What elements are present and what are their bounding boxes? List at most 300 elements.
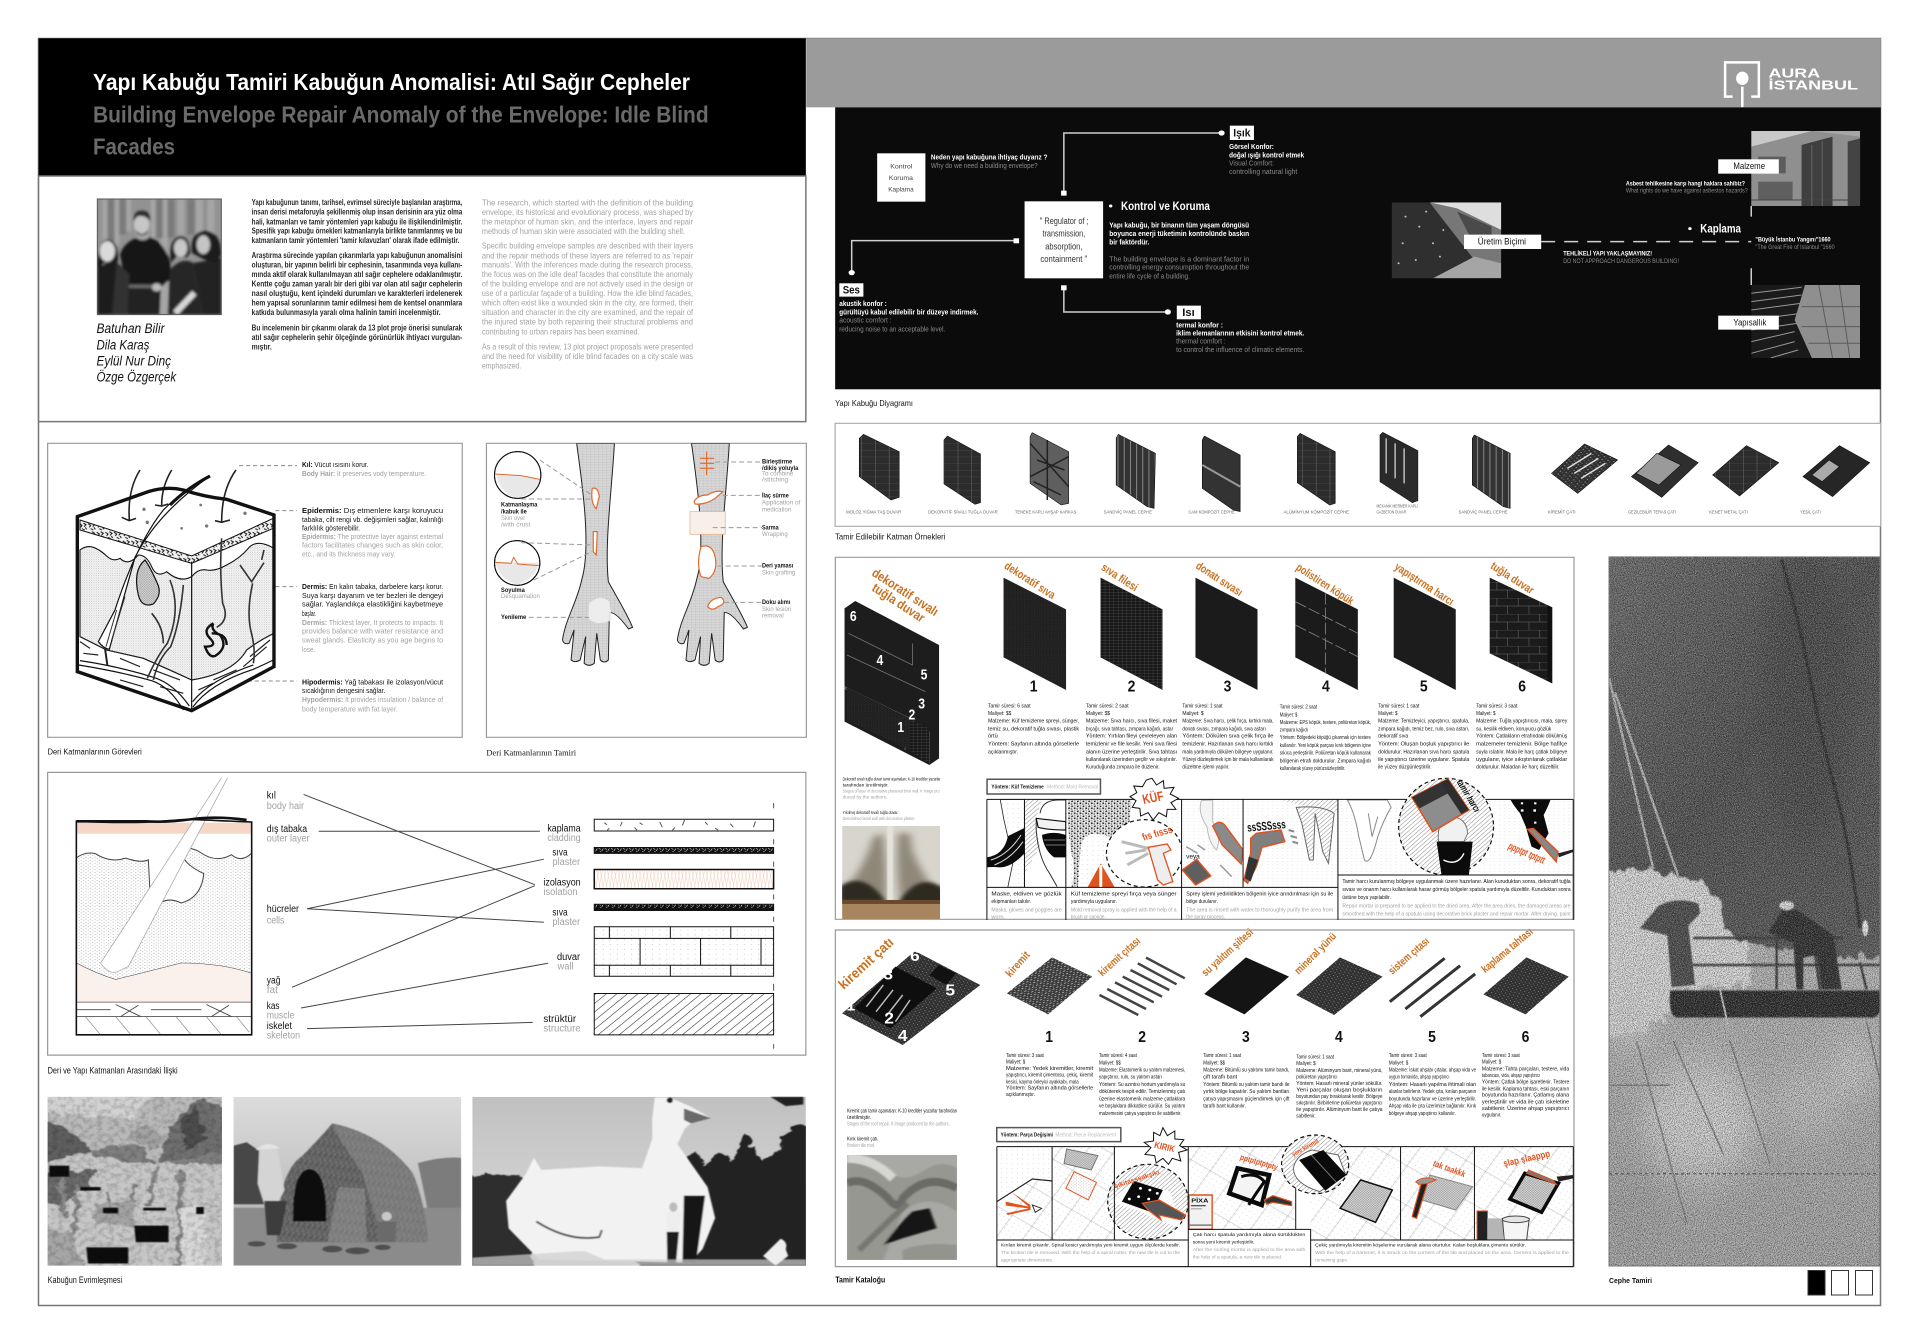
scene: tiles marked <box>1052 1147 1114 1240</box>
layer 5 system battens <box>1390 958 1475 1046</box>
building layer labels <box>543 823 581 1034</box>
building layer labels: sıva <box>552 907 568 918</box>
roof layer descriptions: Tamir süresi: 1 saat <box>1203 1053 1241 1059</box>
wall layer axonometric: 4 <box>877 651 884 668</box>
roof layer descriptions: Tamir süresi: 3 saat <box>1389 1053 1427 1059</box>
stage notes <box>843 777 941 822</box>
photo: material <box>1751 131 1860 206</box>
layer 1 tile <box>1007 957 1092 1046</box>
layer descriptions: Malzeme: Tuğla yapıştırıcısı, mala, sprey <box>1476 719 1568 724</box>
roof layer descriptions: uygun tornavida, ahşap yapıştırıcı <box>1389 1075 1450 1080</box>
caption: skin functions: Deri Katmanlarının Görevleri <box>48 748 142 757</box>
skin function notes: başlar. <box>302 610 316 618</box>
roof layer axonometric: 6 <box>910 947 920 965</box>
english body text: which often exist like a wounded skin in the city, are formed, their <box>481 299 693 308</box>
panel: tiled roof repair <box>835 930 1574 1285</box>
method tag: mould cleaning: Yöntem: Küf Temizleme <box>991 785 1044 790</box>
label: sound: Ses <box>843 284 860 296</box>
roof layer descriptions: Tamir süresi: 1 saat <box>1296 1054 1334 1060</box>
layer 2 mesh <box>1100 578 1163 695</box>
turkish body text: Araştırma sürecinde yapılan çıkarımlarla yapı kabuğunun anomalisini <box>252 252 462 260</box>
layer 3 reinforcement plaster: 3 <box>1224 678 1231 695</box>
leader lines <box>199 466 297 681</box>
layer 4 polystyrene foam <box>1295 578 1358 695</box>
label: material <box>1718 159 1779 174</box>
team photo <box>97 199 221 315</box>
panel: introduction <box>39 176 806 422</box>
question <box>931 154 1047 170</box>
skin function notes: Hypodermis: It provides insulation / balance of <box>302 696 443 704</box>
panel: gray header band with logo <box>806 38 1881 107</box>
new tile detail circle <box>1282 1135 1349 1194</box>
roof layer descriptions: Maliyet: $ <box>1006 1060 1026 1065</box>
label: heat: termal konfor : <box>1176 322 1223 329</box>
roof layer descriptions: Tamir süresi: 3 saat <box>1482 1053 1520 1059</box>
layer 6 brick wall: 6 <box>1518 678 1526 695</box>
skin section illustration <box>76 778 252 1035</box>
roof stage notes: üretilmiştir. <box>847 1115 871 1121</box>
layer descriptions: Maliyet: $ <box>1280 712 1297 718</box>
connection lines <box>292 794 548 1029</box>
repair labels right: To combine <box>762 469 793 477</box>
layer titles: plastered wall: sıva filesi <box>1099 562 1140 594</box>
turkish body text: insan derisi metaforuyla şekillenmiş olup insan derisinin ara yüz olma <box>252 208 462 217</box>
roof layer descriptions: boyutunda hazırlanır. Çatlamış alana <box>1482 1093 1569 1098</box>
layer 6 cladding board <box>1483 957 1569 1046</box>
layer titles: tiled roof: mineral yünü <box>1292 930 1339 977</box>
scene: hammering <box>1401 1147 1474 1240</box>
sample labels: SANDVİÇ PANEL CEPHE <box>1459 509 1507 515</box>
english body text: Specific building envelope samples are described with their layers <box>482 242 693 251</box>
comic captions: tile replacement: Çatı harcı spatula yardımıyla alana sürüldükten <box>1193 1232 1306 1237</box>
method tag: mould cleaning: Method: Mold Removal <box>1047 785 1098 790</box>
author names: Özge Özgerçek <box>97 369 177 385</box>
skin function notes: body temperature with fat layer. <box>302 705 398 714</box>
skin function notes: Dermis: En kalın tabaka, darbelere karşı korur. <box>302 583 443 591</box>
roof layer descriptions: Maliyet: $ <box>1296 1061 1316 1067</box>
turkish body text: Yapı kabuğunun tanımı, tarihsel, evrimsel süreciyle başlanılan araştırma, <box>252 199 462 207</box>
building layer labels: wall <box>557 961 574 972</box>
label: sound <box>839 283 978 333</box>
comic captions: tile replacement: appropriate dimensions. <box>1001 1258 1053 1263</box>
label: structural: Yapısallık <box>1733 318 1767 328</box>
layer descriptions: kullanılarak üzerinden geçilir ve sıkıştırılır. <box>1086 757 1177 763</box>
skin layer labels: hücreler <box>267 903 299 914</box>
skin function notes: sağlar. Yaşlandıkça elastikliğini kaybetmeye <box>302 600 444 609</box>
skin function notes: sıcaklığının dengesini sağlar. <box>302 687 385 695</box>
roof layer axonometric: 4 <box>898 1027 908 1045</box>
photo: mouldy wall <box>837 826 946 919</box>
label: light: Visual Comfort: <box>1229 160 1274 168</box>
label: structural <box>1718 316 1779 330</box>
layer descriptions: kullanılır. Yeni köpük parçası kırık bölgenin içine <box>1280 743 1371 749</box>
comic captions: mould cleaning: ekipmanları takılır. <box>991 899 1031 905</box>
turkish body text: katkıda bulunmasıyla yaralı olma halinin tamiri incelenmiştir. <box>252 309 441 317</box>
comic captions: mould cleaning: smoothed with the help of a spatula using decorative brick plaster and repair mortar. After drying, paint <box>1342 911 1571 917</box>
sample labels: GAZBETON DUVAR <box>1377 509 1406 515</box>
caption: relation: Deri ve Yapı Katmanları Arasındaki İlişki <box>48 1066 178 1076</box>
roof stage notes: Stages of the roof repair. K Image produced by the authors. <box>847 1121 950 1127</box>
scene: mould spray <box>1066 799 1182 887</box>
arms illustration <box>563 443 747 665</box>
roof layer axonometric: 5 <box>945 982 955 999</box>
roof layer descriptions: çatıya yapışmasını güçlendirmek için çift <box>1203 1096 1290 1102</box>
skin layer labels: body hair <box>267 800 304 811</box>
title english: Building Envelope Repair Anomaly of the Envelope: Idle Blind <box>93 103 709 128</box>
layer descriptions: donatı sıvası, zımpara kağıdı, sıva astarı <box>1182 726 1266 732</box>
skin function notes: Kıl: Vücut ısısını korur. <box>302 461 369 469</box>
comic captions: mould cleaning: The area is rinsed with water to thoroughly purify the area from <box>1186 907 1333 913</box>
scene: cement applied <box>1474 1147 1573 1240</box>
panel: skin layer repair <box>486 443 806 758</box>
cutter sound: şıkıtaşşşakşıkı <box>1113 1169 1161 1190</box>
layer descriptions: Maliyet: $ <box>1476 711 1496 717</box>
roof layer axonometric: 2 <box>884 1010 894 1028</box>
layer descriptions: su, kesilik eldiven, koruyucu gözlük <box>1476 726 1552 732</box>
photo: broken tile <box>847 1155 957 1260</box>
skin function notes: etc., and its thickness may vary. <box>302 550 395 559</box>
building layer labels: sıva <box>552 847 568 858</box>
starburst: mould <box>1130 778 1179 820</box>
wall layer axonometric <box>845 601 939 765</box>
layer 6 cladding board: 6 <box>1522 1029 1529 1046</box>
english body text: situation and character in the city are examined, and the repair of <box>482 309 693 317</box>
repair labels right <box>762 457 801 619</box>
title turkish: Yapı Kabuğu Tamiri Kabuğun Anomalisi: Atıl Sağır Cepheler <box>93 70 690 95</box>
new tile detail circle: yeni kiremit <box>1291 1138 1321 1158</box>
title english: Facades <box>93 135 175 160</box>
english body text: of the building envelope and are not actively used in the design or <box>482 280 693 289</box>
roof layer descriptions: Maliyet: $ <box>1389 1060 1408 1066</box>
layer descriptions: temizlenir. Hazırlanan sıva harcı kırtıklı <box>1182 742 1274 747</box>
cement sound: şlap şlaappp <box>1502 1149 1551 1169</box>
box: regulator: transmission, <box>1042 229 1085 239</box>
layer titles: plastered wall: yapıştırma harcı <box>1392 561 1456 608</box>
roof layer descriptions: uygulanır. <box>1482 1112 1501 1118</box>
roof layer descriptions: Tamir süresi: 3 saat <box>1006 1053 1044 1059</box>
comic captions: mould cleaning: Küf temizleme spreyi fırça veya sünger <box>1071 891 1177 897</box>
roof layer descriptions: Malzeme: Bitümlü su yalıtımı tamir bandı, <box>1203 1068 1290 1073</box>
stage notes: tarafından üretilmiştir. <box>843 783 889 788</box>
roof layer descriptions: Ahşap vida ile çıta üzerimize bağlanılır. Kırık <box>1389 1104 1477 1109</box>
panel: building envelope diagram: Neden yapı kabuğuna ihtiyaç duyarız ? <box>931 154 1047 161</box>
english body text: and the need for visibility of idle blind facades on a city scale was <box>482 353 693 361</box>
layer descriptions: Malzeme: Sıva harcı, sıva filesi, maket <box>1086 719 1177 724</box>
layer titles: tiled roof: kiremit çıtası <box>1096 935 1143 979</box>
repair labels right: Birleştirme <box>762 457 792 465</box>
roof layer descriptions: Yöntem: Çatlak bölge işaretlenir. Testere <box>1482 1079 1569 1085</box>
roof layer descriptions: Malzeme: İskat ahşabı çıtalar, ahşap vida ve <box>1389 1066 1476 1073</box>
sample labels: SANDVİÇ PANEL CEPHE <box>1104 509 1152 515</box>
layer descriptions: Tamir süresi: 1 saat <box>1182 703 1223 709</box>
connector nodes <box>849 130 1225 315</box>
roof layer descriptions: Yöntem: Su azıntısı hortum yardımıyla su <box>1099 1082 1186 1088</box>
text: envelope role <box>1109 221 1249 280</box>
roof layer descriptions: tabancası, vida, ahşap yapıştırıcı <box>1482 1073 1540 1079</box>
repair labels right: Application of <box>762 498 801 506</box>
label: light: Görsel Konfor: <box>1229 143 1274 151</box>
building layer labels: strüktür <box>543 1013 576 1024</box>
starburst: mould: KÜF <box>1141 788 1165 808</box>
method tag: piece replacement: Method: Piece Replacement <box>1055 1133 1116 1138</box>
layer titles: plastered wall: tuğla duvar <box>869 580 928 625</box>
layer descriptions: kullanılarak yüzey pürüzsüzleştirilir. <box>1280 766 1345 772</box>
skin function notes: Epidermis: The protective layer against external <box>302 533 443 541</box>
repair labels left: /with crust <box>501 520 531 528</box>
layer 5 system battens: 5 <box>1428 1029 1436 1046</box>
repair labels right: /stitching <box>762 475 788 483</box>
repair labels right: Sarma <box>762 523 779 531</box>
stage notes: Demolished facial wall with decorative plaster. <box>843 817 916 822</box>
scene: broken tile <box>997 1147 1053 1240</box>
turkish body text <box>252 199 462 352</box>
mortar detail circle <box>1399 778 1494 875</box>
comic strip: tile replacement <box>997 1128 1573 1267</box>
layer 5 adhesive mortar <box>1394 578 1456 695</box>
turkish body text: nasıl oluştuğu, kent içindeki durumları ve karakterleri irdelenerek <box>252 290 462 298</box>
layer titles: tiled roof: su yalıtım şiltesi <box>1200 927 1256 979</box>
skin function notes: factors facilitates changes such as skin color, <box>302 541 443 550</box>
photo: cappadocia rock dwellings <box>48 1096 222 1266</box>
roof layer descriptions: boyutunda hazırlanır ve üzerine yerleştirilir. <box>1389 1096 1476 1102</box>
panel: building envelope diagram: controlling energy consumption throughout the <box>1109 263 1249 271</box>
building layer labels: plaster <box>552 856 580 867</box>
comic captions: tile replacement: After the roofing mortar is applied to the area with <box>1193 1247 1306 1252</box>
panel: building envelope diagram: iklim elemanlarının etkisini kontrol etmek. <box>1176 330 1304 337</box>
comic captions: mould cleaning: Sprey işlemi yedirildikten bölgenin iyice arındırılması için su ile <box>1186 891 1333 897</box>
label: light: controlling natural light <box>1229 168 1298 176</box>
english body text: The research, which started with the definition of the building <box>482 199 693 208</box>
box: kontrol koruma kaplama: Kontrol <box>890 163 912 171</box>
panel: building envelope diagram: boyunca enerji tüketimin kontrolünde baskın <box>1109 229 1249 238</box>
layer descriptions: doldurulur. Maladan ile harç düzeltilir. <box>1476 765 1560 770</box>
wall layer axonometric: 2 <box>909 706 915 723</box>
comic captions: tile replacement: Kırılan kiremit çıkarılır. Spiral kesici yardımıyla yeni kiremit uygun ölçülerde kesilir. <box>1001 1243 1180 1247</box>
layer descriptions: Maliyet: $ <box>1182 711 1204 717</box>
roof layer axonometric: 1 <box>846 997 855 1014</box>
fire note <box>1755 235 1835 251</box>
turkish body text: mıştır. <box>252 343 272 352</box>
scene: repair mortar <box>1338 799 1573 875</box>
caption: facade repair: Cephe Tamiri <box>1609 1276 1652 1285</box>
skin layer labels: iskelet <box>267 1020 292 1031</box>
layer titles: tiled roof: kiremit çatı <box>835 934 896 992</box>
skin function notes <box>302 461 444 714</box>
layer descriptions: Yöntem: Bölgedeki köpüğü çıkarmak için testere <box>1280 735 1371 741</box>
layer descriptions: örtü <box>988 734 998 739</box>
repair labels right: medication <box>762 505 791 513</box>
layer descriptions: Yöntem: Sayfanın altında görsellerle <box>988 742 1079 747</box>
caption: evolution: Kabuğun Evrimleşmesi <box>48 1276 122 1285</box>
photo: production form <box>1392 202 1501 278</box>
repair labels left: Skin over <box>501 514 525 522</box>
layer descriptions: Tamir süresi: 2 saat <box>1086 703 1129 709</box>
method tag: mould cleaning <box>987 779 1100 794</box>
wall layer axonometric: 3 <box>918 695 925 712</box>
repair labels right: removal <box>762 611 784 619</box>
roof layer descriptions: Maliyet: $ <box>1482 1060 1502 1065</box>
english body text: contributing to urban repairs has been examined. <box>482 328 640 337</box>
comic captions: mould cleaning: Repair mortar is prepared to be applied to the dried area. After the area dries, the damaged areas are <box>1342 903 1571 909</box>
detail circles <box>495 452 541 585</box>
roof layer descriptions: boyutundan pay bırakılarak kesilir. Bölgeye <box>1296 1094 1383 1100</box>
skin function notes: provides balance with water resistance and <box>302 627 443 636</box>
logo: Aura Istanbul: İSTANBUL <box>1768 78 1858 92</box>
author names: Eylül Nur Dinç <box>97 353 171 368</box>
text: Yapı Kabuğu Diyagramı <box>835 399 913 408</box>
roof layer descriptions: kesici, kayma önleyici ayakkabı, mala <box>1006 1079 1079 1085</box>
layer 2 tile battens: 2 <box>1138 1029 1146 1046</box>
layer 6 brick wall <box>1490 578 1552 695</box>
layer descriptions: ile yapıştırıcı üzerine uygulanır. Spatula <box>1378 757 1470 763</box>
repair labels right: /dikiş yoluyla <box>762 464 798 472</box>
layer titles: tiled roof: sistem çıtası <box>1386 935 1432 977</box>
layer descriptions: Yöntem: Yırtılan fileyi çevreleyen alan <box>1086 734 1177 739</box>
roof layer descriptions: döküterek tespit edilir. Temizlenmiş çatı <box>1099 1089 1185 1095</box>
layer descriptions: Malzeme: Küf temizleme spreyi, sünger, <box>988 719 1079 724</box>
warning text: TEHLİKELİ YAPI YAKLAŞMAYINIZ! <box>1563 249 1652 257</box>
layer titles: plastered wall: dekoratif sıvalı <box>869 565 941 619</box>
label: heat <box>1176 306 1304 354</box>
english body text: methods of human skin were associated with the building shell. <box>482 228 685 236</box>
layer descriptions: doldurulur. Hazırlanan sıva harcı spatula <box>1378 749 1470 755</box>
skin layer labels: skeleton <box>267 1030 300 1041</box>
caption: skin repair: Deri Katmanlarının Tamiri <box>486 748 576 758</box>
layer descriptions: malzemeler temizlenir. Bölge hafifçe <box>1476 742 1567 747</box>
repair labels left: Katmanlaşma <box>501 500 537 508</box>
text: envelope role: entire life cycle of a building. <box>1109 272 1190 280</box>
hammer sound: tak taakkk <box>1431 1159 1468 1179</box>
roof stage notes: Broken tile roof. <box>847 1143 875 1149</box>
comic captions: tile replacement: the help of a spatula, a new tile is placed. <box>1193 1255 1282 1260</box>
roof layer descriptions: Malzeme: Alüminyum bant, mineral yünü, <box>1296 1068 1383 1074</box>
layer descriptions: Maliyet: $$ <box>988 711 1011 717</box>
building layer labels: structure <box>543 1023 581 1034</box>
wall layer axonometric: 5 <box>921 666 927 683</box>
layer 2 mesh: 2 <box>1128 678 1135 695</box>
layer descriptions: sıkıca yerleştirilir. Poliüretan köpük kullanarak <box>1280 751 1371 756</box>
layer 1 plaster: 1 <box>1030 678 1038 695</box>
starburst: broken: KIRIK <box>1153 1140 1177 1155</box>
roof layer descriptions: Maliyet: $$ <box>1203 1060 1225 1066</box>
sample labels: TENEKE KAPLI AHŞAP KARKAS <box>1015 509 1076 515</box>
panel: building envelope diagram: Asbest tehlikesine karşı hangi haklara sahibiz? <box>1626 180 1745 187</box>
author names: Batuhan Bilir <box>97 320 165 336</box>
roof layer descriptions: ile yapıştırılır. Alüminyum bant ile çatıya <box>1296 1107 1383 1113</box>
skin layer labels: yağ <box>267 975 280 986</box>
panel frame lines <box>987 799 1573 920</box>
roof layer descriptions: ile kesilir. Kaplama tahtası, eski parçanın <box>1482 1086 1569 1092</box>
repair labels right: İlaç sürme <box>762 491 789 499</box>
roof layer descriptions: malzemesini çatıya yapıştırıcı ile sabitlenir. <box>1099 1111 1182 1117</box>
heading: kontrol ve koruma <box>1109 200 1210 213</box>
panel: evolution of the envelope photos <box>30 1087 826 1285</box>
mortar sound: pptptptptpty <box>1239 1152 1279 1172</box>
layer descriptions: Yöntem: Çatlakların etrafındaki dökülmüş <box>1476 734 1568 739</box>
layer 4 mineral wool <box>1296 957 1383 1046</box>
roof layer descriptions: yerleştirilir ve vida ile çatı iskeletine <box>1482 1099 1569 1105</box>
layer descriptions: bölgenin etrafı doldurulur. Zımpara kağıdı <box>1280 758 1371 764</box>
roof stage notes: Kiremit çatı tamir aşamaları: K-10 kreditler yazarlar tarafından <box>847 1108 957 1114</box>
repair labels right: Deri yaması <box>762 561 793 569</box>
sample labels: KİREMİT ÇATI <box>1548 509 1576 515</box>
roof layer axonometric: 3 <box>883 966 893 984</box>
layer descriptions: Tamir süresi: 2 saat <box>1280 705 1317 710</box>
layer titles: plastered wall: polistiren köpük <box>1294 562 1356 608</box>
heading: cladding <box>1688 222 1741 236</box>
panel: repairable layer samples <box>835 423 1881 542</box>
roof layer descriptions <box>1006 1053 1569 1119</box>
panel: building envelope diagram: Why do we need a building envelope? <box>931 162 1038 170</box>
layer descriptions: mala yardımıyla dökülen bölgeye uygulanır. <box>1182 749 1274 755</box>
comic captions: mould cleaning: the spray process. <box>1186 915 1225 920</box>
building layer section <box>594 803 774 1049</box>
layer titles: plastered wall: dekoratif sıva <box>1002 560 1057 602</box>
layer descriptions: düzeltme işlemi yapılır. <box>1182 765 1229 770</box>
skin function notes: Hipodermis: Yağ tabakası ile izolasyon/vücut <box>302 678 443 687</box>
turkish body text: hali, katmanları ve tamir yöntemleri yapı kabuğu ile ilişkilendirilmiştir. <box>252 218 462 227</box>
layer 3 waterproofing <box>1204 957 1289 1046</box>
wall samples <box>859 432 1510 512</box>
method tag: piece replacement <box>997 1128 1121 1142</box>
photo: thatched hut <box>234 1097 461 1266</box>
turkish body text: katmanların tamir yöntemleri 'tamir kılavuzları' olarak ifade edilmiştir. <box>252 237 459 245</box>
layer 3 waterproofing: 3 <box>1242 1029 1250 1046</box>
comic captions: mould cleaning: Maske, eldiven ve gözlük <box>991 891 1062 897</box>
scene: spiral cutter <box>1107 1164 1188 1240</box>
scene: brush and sponge <box>1182 799 1243 887</box>
comic captions: tile replacement <box>1001 1232 1569 1263</box>
scene: mortar applied <box>1188 1147 1296 1229</box>
layer descriptions: Tamir süresi: 3 saat <box>1476 703 1517 709</box>
layer descriptions: bıçağı, sıva tahtası, zımpara kağıdı, astar <box>1086 726 1174 732</box>
layer 4 polystyrene foam: 4 <box>1322 678 1330 695</box>
sample labels: GEZİLEBİLİR TERAS ÇATI <box>1628 509 1676 515</box>
panel: building envelope diagram: gürültüyü kabul edilebilir bir düzeye indirmek. <box>839 309 978 316</box>
repair labels right: Skin lesion <box>762 605 791 613</box>
skin function notes: lose. <box>302 646 315 654</box>
layer descriptions: uygulanır, iyice sıkıştırılarak çatlaklar <box>1476 757 1568 763</box>
building layer labels: cladding <box>547 832 581 843</box>
comic captions: mould cleaning: Masks, gloves and goggles are <box>991 907 1062 913</box>
roof layer descriptions: yapıştırıcı, rulo, su yalıtım astarı <box>1099 1075 1162 1080</box>
layer 4 mineral wool: 4 <box>1335 1029 1343 1046</box>
skin layer labels: fat <box>267 984 278 995</box>
panel: building envelope diagram: DO NOT APPROACH DANGEROUS BUILDING! <box>1563 257 1679 265</box>
box: kontrol koruma kaplama: Koruma <box>889 174 914 182</box>
layer descriptions: açıklanmıştır. <box>988 749 1018 755</box>
roof layer descriptions: yapıştırıcı, kiremit çimentosu, çekiç, kiremit <box>1006 1073 1093 1078</box>
leader lines <box>521 460 762 617</box>
label: heat: Isı <box>1182 306 1195 318</box>
turkish body text: atıl sağır cephelerin şehir ölçeğinde görünürlük ihtiyacı vurgulan- <box>252 334 462 342</box>
layer descriptions: Kuruduğunda zımpara ile düzlenir. <box>1086 765 1160 770</box>
repair labels left: Desquamation <box>501 592 540 600</box>
layer titles: tiled roof: kaplama tahtası <box>1480 926 1535 976</box>
building layer labels: plaster <box>552 916 580 927</box>
scene: protective gear <box>987 799 1066 887</box>
layer descriptions: Maliyet: $ <box>1378 711 1398 717</box>
comic captions: mould cleaning: Mold removal spray is applied with the help of a <box>1071 907 1177 913</box>
panel: facade repair photo <box>1608 556 1880 1266</box>
wall layer axonometric: 1 <box>897 718 904 735</box>
roof stage notes: Kırık kiremit çatı. <box>847 1136 879 1142</box>
comic captions: mould cleaning: yardımıyla uygulanır. <box>1071 899 1117 905</box>
layer descriptions: Maliyet: $$ <box>1086 711 1110 717</box>
repair labels left: /kabuk ile <box>501 507 527 515</box>
english body text: the injured state by both repairing their structural problems and <box>482 318 693 327</box>
skin layer labels: outer layer <box>267 833 310 844</box>
